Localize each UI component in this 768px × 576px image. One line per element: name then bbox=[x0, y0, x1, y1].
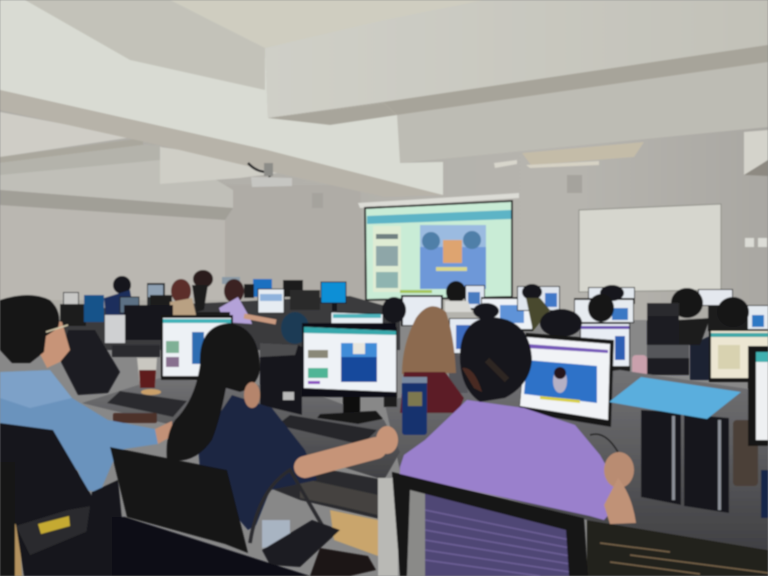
back row students bbox=[382, 281, 749, 380]
PC towers on right desk bbox=[641, 410, 729, 513]
beam soffit right bbox=[268, 45, 768, 125]
projection screen bbox=[358, 193, 519, 301]
brown haired student bbox=[402, 306, 468, 393]
man's trousers bbox=[80, 480, 122, 576]
chair front left bbox=[0, 423, 97, 576]
air conditioner bbox=[494, 142, 644, 168]
PC tower left desk bbox=[260, 343, 302, 415]
man in blue shirt bbox=[0, 295, 172, 492]
back left monitors bbox=[60, 277, 346, 326]
back PC towers bbox=[647, 303, 689, 375]
chair front bottom bbox=[112, 517, 310, 576]
left ceiling panels bbox=[0, 112, 285, 220]
keyboard center bbox=[277, 415, 377, 445]
iced drink cup bbox=[137, 358, 161, 395]
red plaid bag bbox=[400, 372, 464, 413]
center back monitors bbox=[401, 285, 768, 374]
monitor with design app center bbox=[302, 323, 396, 424]
monitor far row left bbox=[331, 312, 383, 327]
blue plastic folder bbox=[609, 377, 741, 419]
room walls bbox=[0, 0, 768, 320]
back student in black bbox=[104, 276, 139, 318]
left desk lower cabinet bbox=[250, 455, 384, 520]
ceiling beam left bbox=[0, 0, 443, 197]
back student blue cap bbox=[281, 312, 309, 344]
back dark monitors bbox=[105, 305, 230, 357]
chair second bbox=[110, 447, 248, 553]
ceiling beam upper right bbox=[265, 0, 768, 118]
whiteboard bbox=[579, 204, 721, 292]
pink bottle bbox=[632, 355, 647, 385]
right desk surface bbox=[384, 370, 768, 550]
wall switches bbox=[745, 238, 767, 247]
chair behind man bbox=[60, 330, 120, 395]
near left monitor stub at center bbox=[384, 327, 397, 407]
woman in navy bbox=[167, 323, 398, 530]
mouse cable bbox=[590, 434, 618, 452]
keyboard left bbox=[107, 391, 187, 417]
phone on desk bbox=[113, 413, 157, 423]
near right monitor edge bbox=[748, 346, 768, 446]
back student with reddish hair bbox=[170, 270, 213, 316]
wall returning beside beam bbox=[384, 112, 443, 195]
handbag on chair bbox=[250, 470, 340, 567]
wall speakers bbox=[312, 175, 582, 208]
back student in lilac bbox=[219, 279, 284, 324]
metal tumbler bbox=[733, 420, 758, 486]
right monitor cream screen bbox=[709, 329, 768, 382]
chair purple student bbox=[392, 472, 588, 576]
ceiling bbox=[170, 0, 484, 48]
projector bbox=[248, 163, 292, 187]
monitor with design app left bbox=[161, 315, 233, 380]
wood floor bbox=[0, 447, 378, 576]
right desk drawer bbox=[587, 520, 768, 576]
student in purple shirt bbox=[400, 317, 636, 524]
ceiling beam lower right bbox=[397, 62, 768, 163]
monitor purple poster bbox=[519, 333, 614, 427]
blue tumbler bbox=[402, 377, 427, 435]
left desk surface bbox=[82, 378, 400, 480]
dark object far left bbox=[0, 462, 15, 576]
right wall cabinet bbox=[744, 130, 768, 176]
bottom right blue object bbox=[761, 470, 768, 518]
woman's shoes bbox=[310, 548, 376, 576]
table leg bbox=[378, 478, 398, 576]
back desk row bbox=[60, 296, 400, 350]
